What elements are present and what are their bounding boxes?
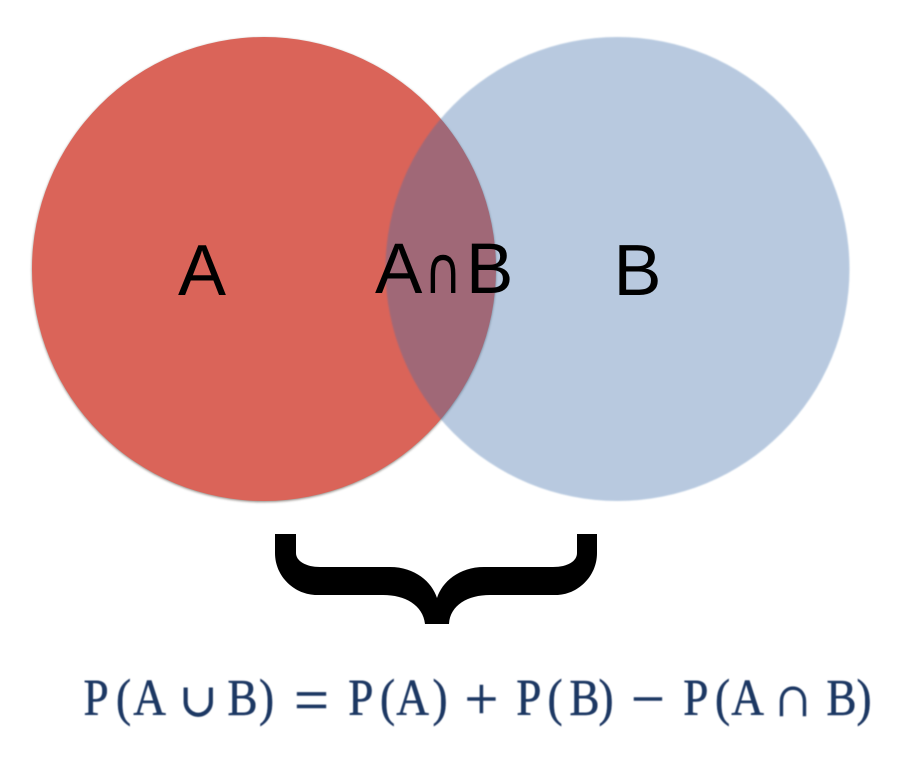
- probability union formula: +: [464, 666, 498, 732]
- probability union formula: =: [294, 667, 329, 735]
- probability union formula: P(B): [516, 669, 614, 727]
- label: A intersection B: B: [466, 230, 513, 309]
- probability union formula: P(A: [683, 669, 764, 727]
- probability union formula: ∩: [772, 664, 814, 729]
- probability union formula: ∪: [179, 675, 218, 726]
- label: A intersection B: [375, 230, 513, 309]
- probability union formula: B): [826, 669, 872, 727]
- probability union formula: P(A: [84, 669, 166, 727]
- label: A intersection B: ∩: [424, 232, 462, 309]
- probability union formula: P(A): [348, 669, 448, 727]
- probability union formula: −: [631, 666, 665, 732]
- label: B: B: [614, 231, 662, 311]
- curly brace: [275, 534, 597, 624]
- probability union formula: [84, 664, 872, 735]
- label: A intersection B: A: [375, 230, 423, 309]
- label: A: A: [178, 231, 226, 311]
- circle A: [32, 37, 496, 502]
- circle B overlapping A: [386, 37, 850, 501]
- probability union formula: B): [227, 669, 274, 727]
